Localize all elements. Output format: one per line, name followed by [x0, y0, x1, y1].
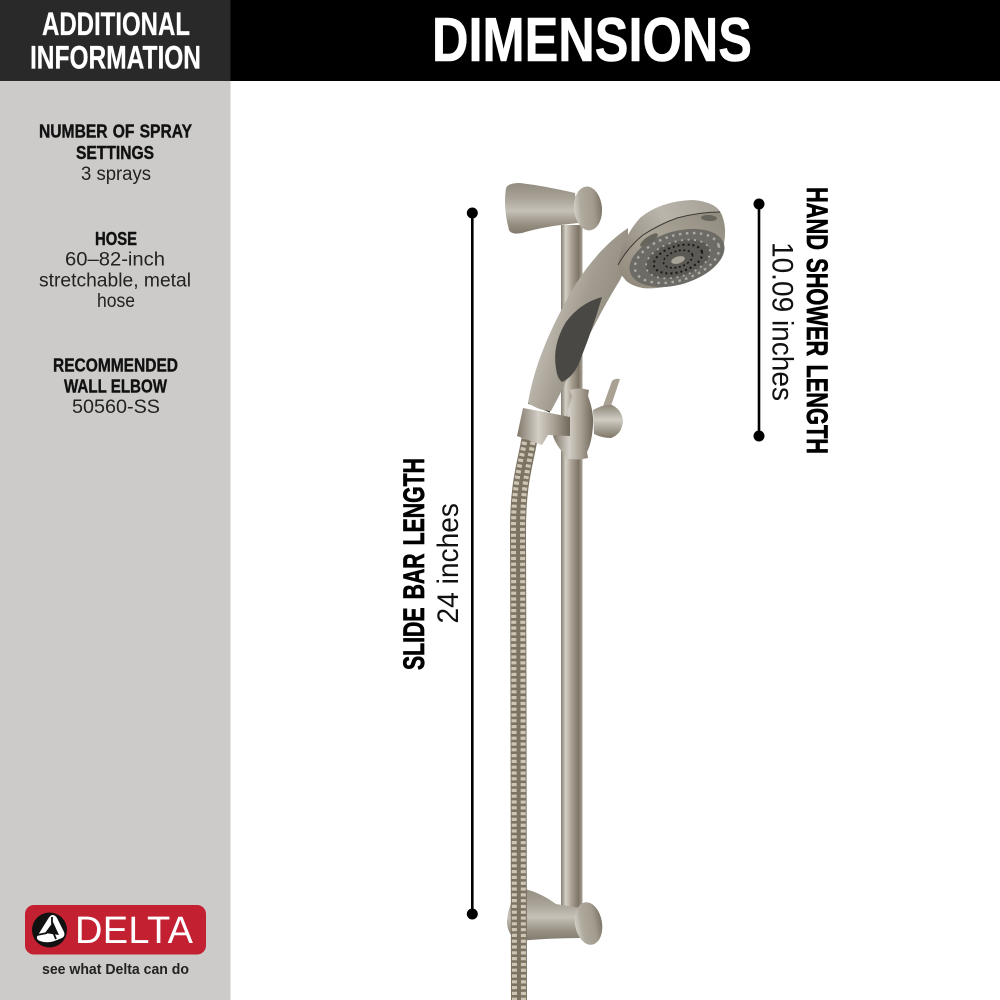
- title: dimensions: DIMENSIONS: [432, 6, 752, 75]
- text block: spray settings: SETTINGS: [76, 142, 154, 163]
- label: hand shower length: [766, 187, 833, 454]
- text block: hose: HOSE: [95, 228, 137, 249]
- label: slide bar length: [398, 458, 465, 670]
- logo wordmark: DELTA: [75, 910, 196, 952]
- handle: [528, 228, 628, 411]
- lever: [603, 379, 620, 406]
- hose: [514, 436, 534, 1000]
- top bracket: [505, 183, 604, 234]
- header bar: additional information: [0, 0, 230, 81]
- heading: additional information: ADDITIONAL: [42, 6, 190, 42]
- product: hand shower on slide bar: [505, 183, 732, 1000]
- head rim: [618, 212, 725, 288]
- text block: hose: [39, 228, 191, 312]
- header bar: dimensions: [230, 0, 1000, 81]
- dimension line: hand shower: [754, 198, 764, 442]
- grip: [555, 297, 602, 382]
- heading: additional information: INFORMATION: [30, 40, 201, 76]
- text block: recommended wall elbow: WALL ELBOW: [64, 376, 167, 397]
- text block: recommended wall elbow: [53, 355, 178, 418]
- logo: delta: [25, 905, 206, 954]
- text block: hose: stretchable, metal: [39, 271, 191, 292]
- head slots: [638, 231, 660, 249]
- text block: spray settings: NUMBER OF SPRAY: [39, 121, 193, 142]
- tagline: see what Delta can do: [42, 961, 189, 978]
- text block: recommended wall elbow: 50560-SS: [72, 397, 160, 418]
- text block: hose: hose: [97, 291, 135, 312]
- text block: spray settings: 3 sprays: [81, 164, 151, 185]
- icon: delta triangle: [32, 912, 67, 948]
- holder mount: [517, 408, 570, 445]
- label: slide bar length: 24 inches: [432, 503, 465, 624]
- knob: [593, 405, 623, 438]
- text block: hose: 60–82-inch: [65, 250, 165, 271]
- label: slide bar length: SLIDE BAR LENGTH: [398, 458, 431, 670]
- holder collar: [528, 403, 550, 412]
- panel: sidebar background: [0, 81, 230, 1000]
- text block: recommended wall elbow: RECOMMENDED: [53, 355, 178, 376]
- bottom bracket: [507, 888, 606, 947]
- valve body: [553, 388, 593, 460]
- heading: additional information: [30, 6, 201, 76]
- label: hand shower length: 10.09 inches: [766, 242, 798, 401]
- text block: spray settings: [39, 121, 193, 185]
- label: hand shower length: HAND SHOWER LENGTH: [800, 187, 833, 454]
- spray face: [622, 218, 732, 298]
- slide bar: [561, 225, 582, 915]
- dimension line: slide bar: [467, 208, 478, 920]
- shower head: [618, 200, 732, 298]
